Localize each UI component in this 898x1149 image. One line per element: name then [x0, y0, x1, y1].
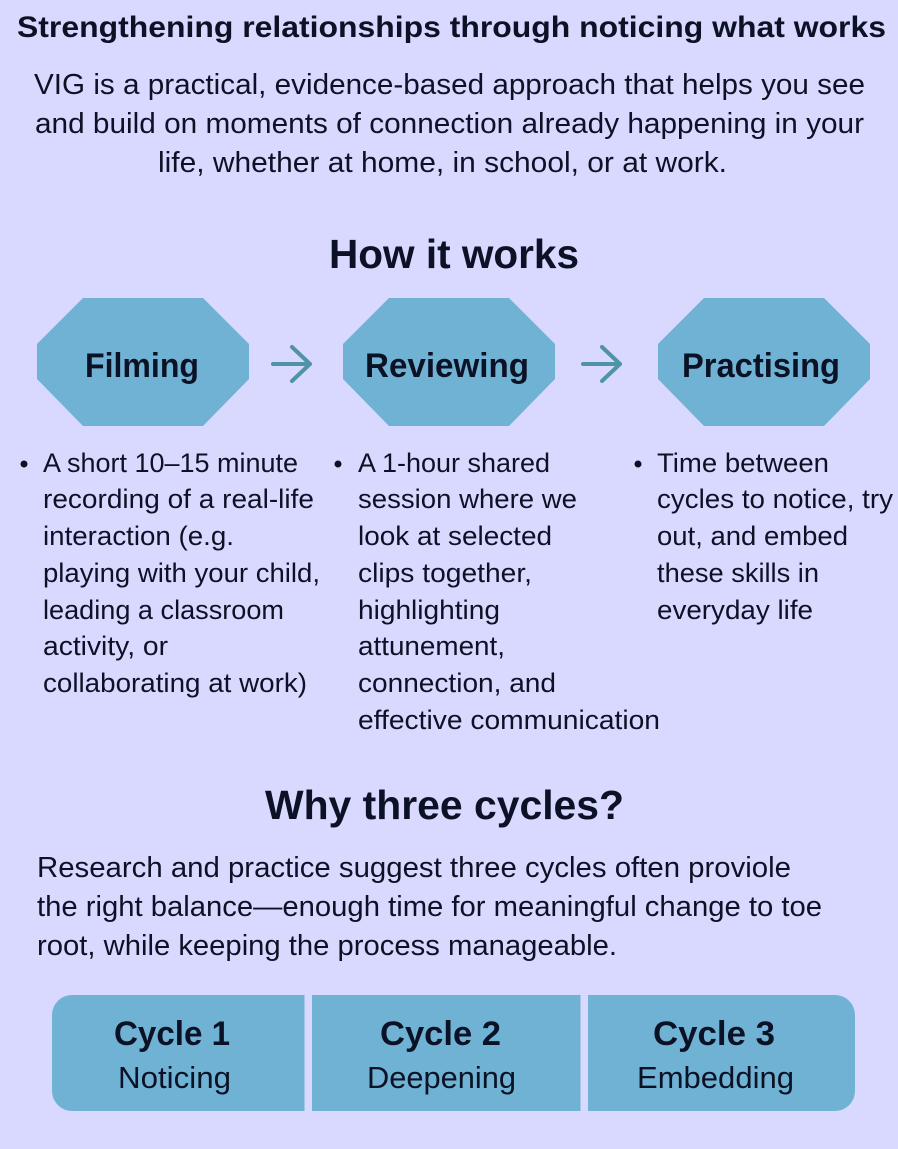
intro paragraph: life, whether at home, in school, or at work. [158, 147, 727, 179]
intro paragraph [34, 69, 865, 179]
cycle 3: Cycle 3 [653, 1015, 775, 1053]
bullet text: filming: leading a classroom [43, 595, 284, 625]
step: reviewing [343, 298, 555, 426]
step: practising: Practising [682, 347, 840, 385]
research paragraph: Research and practice suggest three cycles often proviole [37, 852, 791, 884]
bullet text: reviewing: connection, and [358, 668, 556, 698]
bullet text: reviewing: attunement, [358, 631, 505, 661]
bullet text: filming: activity, or [43, 631, 168, 661]
heading: why three cycles: Why three cycles? [265, 782, 624, 828]
bullet text: reviewing: highlighting [358, 595, 500, 625]
cycle 2: Deepening [367, 1060, 516, 1095]
bullet text: reviewing: session where we [358, 484, 577, 514]
bullet text: reviewing: clips together, [358, 558, 532, 588]
research paragraph [37, 852, 822, 962]
title: Strengthening relationships through noticing what works [17, 11, 886, 44]
bullet text: practising: cycles to notice, try [657, 484, 893, 514]
bullet text: practising: these skills in [657, 558, 819, 588]
bullet text: reviewing [334, 448, 660, 735]
cycle 2 [312, 995, 580, 1111]
bullet text: filming: interaction (e.g. [43, 521, 234, 551]
cycle 1: Cycle 1 [114, 1015, 230, 1053]
bullet text: filming: A short 10–15 minute [43, 448, 298, 478]
bullet text: reviewing: effective communication [358, 705, 660, 735]
arrow: reviewing to practising [583, 347, 620, 381]
bullet text: practising: Time between [657, 448, 829, 478]
bullet text: practising [634, 448, 893, 625]
step: filming: Filming [85, 347, 199, 385]
heading: how it works: How it works [329, 231, 579, 277]
bullet text: filming: recording of a real-life [43, 484, 314, 514]
bullet text: filming: playing with your child, [43, 558, 320, 588]
bullet text: filming: collaborating at work) [43, 668, 307, 698]
cycle 2: Cycle 2 [380, 1015, 501, 1053]
step: reviewing: Reviewing [365, 347, 529, 385]
step: practising [658, 298, 870, 426]
cycle 3 [588, 995, 855, 1111]
bullet text: practising: out, and embed [657, 521, 848, 551]
bullet text: reviewing: look at selected [358, 521, 552, 551]
intro paragraph: and build on moments of connection already happening in your [35, 108, 865, 140]
intro paragraph: VIG is a practical, evidence-based approach that helps you see [34, 69, 865, 101]
cycle 1: Noticing [118, 1060, 231, 1095]
research paragraph: the right balance—enough time for meaningful change to toe [37, 891, 822, 923]
bullet text: reviewing: A 1-hour shared [358, 448, 550, 478]
bullet text: practising: everyday life [657, 595, 813, 625]
step: filming [37, 298, 249, 426]
bullet text: filming [20, 448, 320, 698]
cycle 1 [52, 995, 304, 1111]
research paragraph: root, while keeping the process manageable. [37, 930, 617, 962]
arrow: filming to reviewing [273, 347, 310, 381]
cycle 3: Embedding [637, 1060, 794, 1095]
